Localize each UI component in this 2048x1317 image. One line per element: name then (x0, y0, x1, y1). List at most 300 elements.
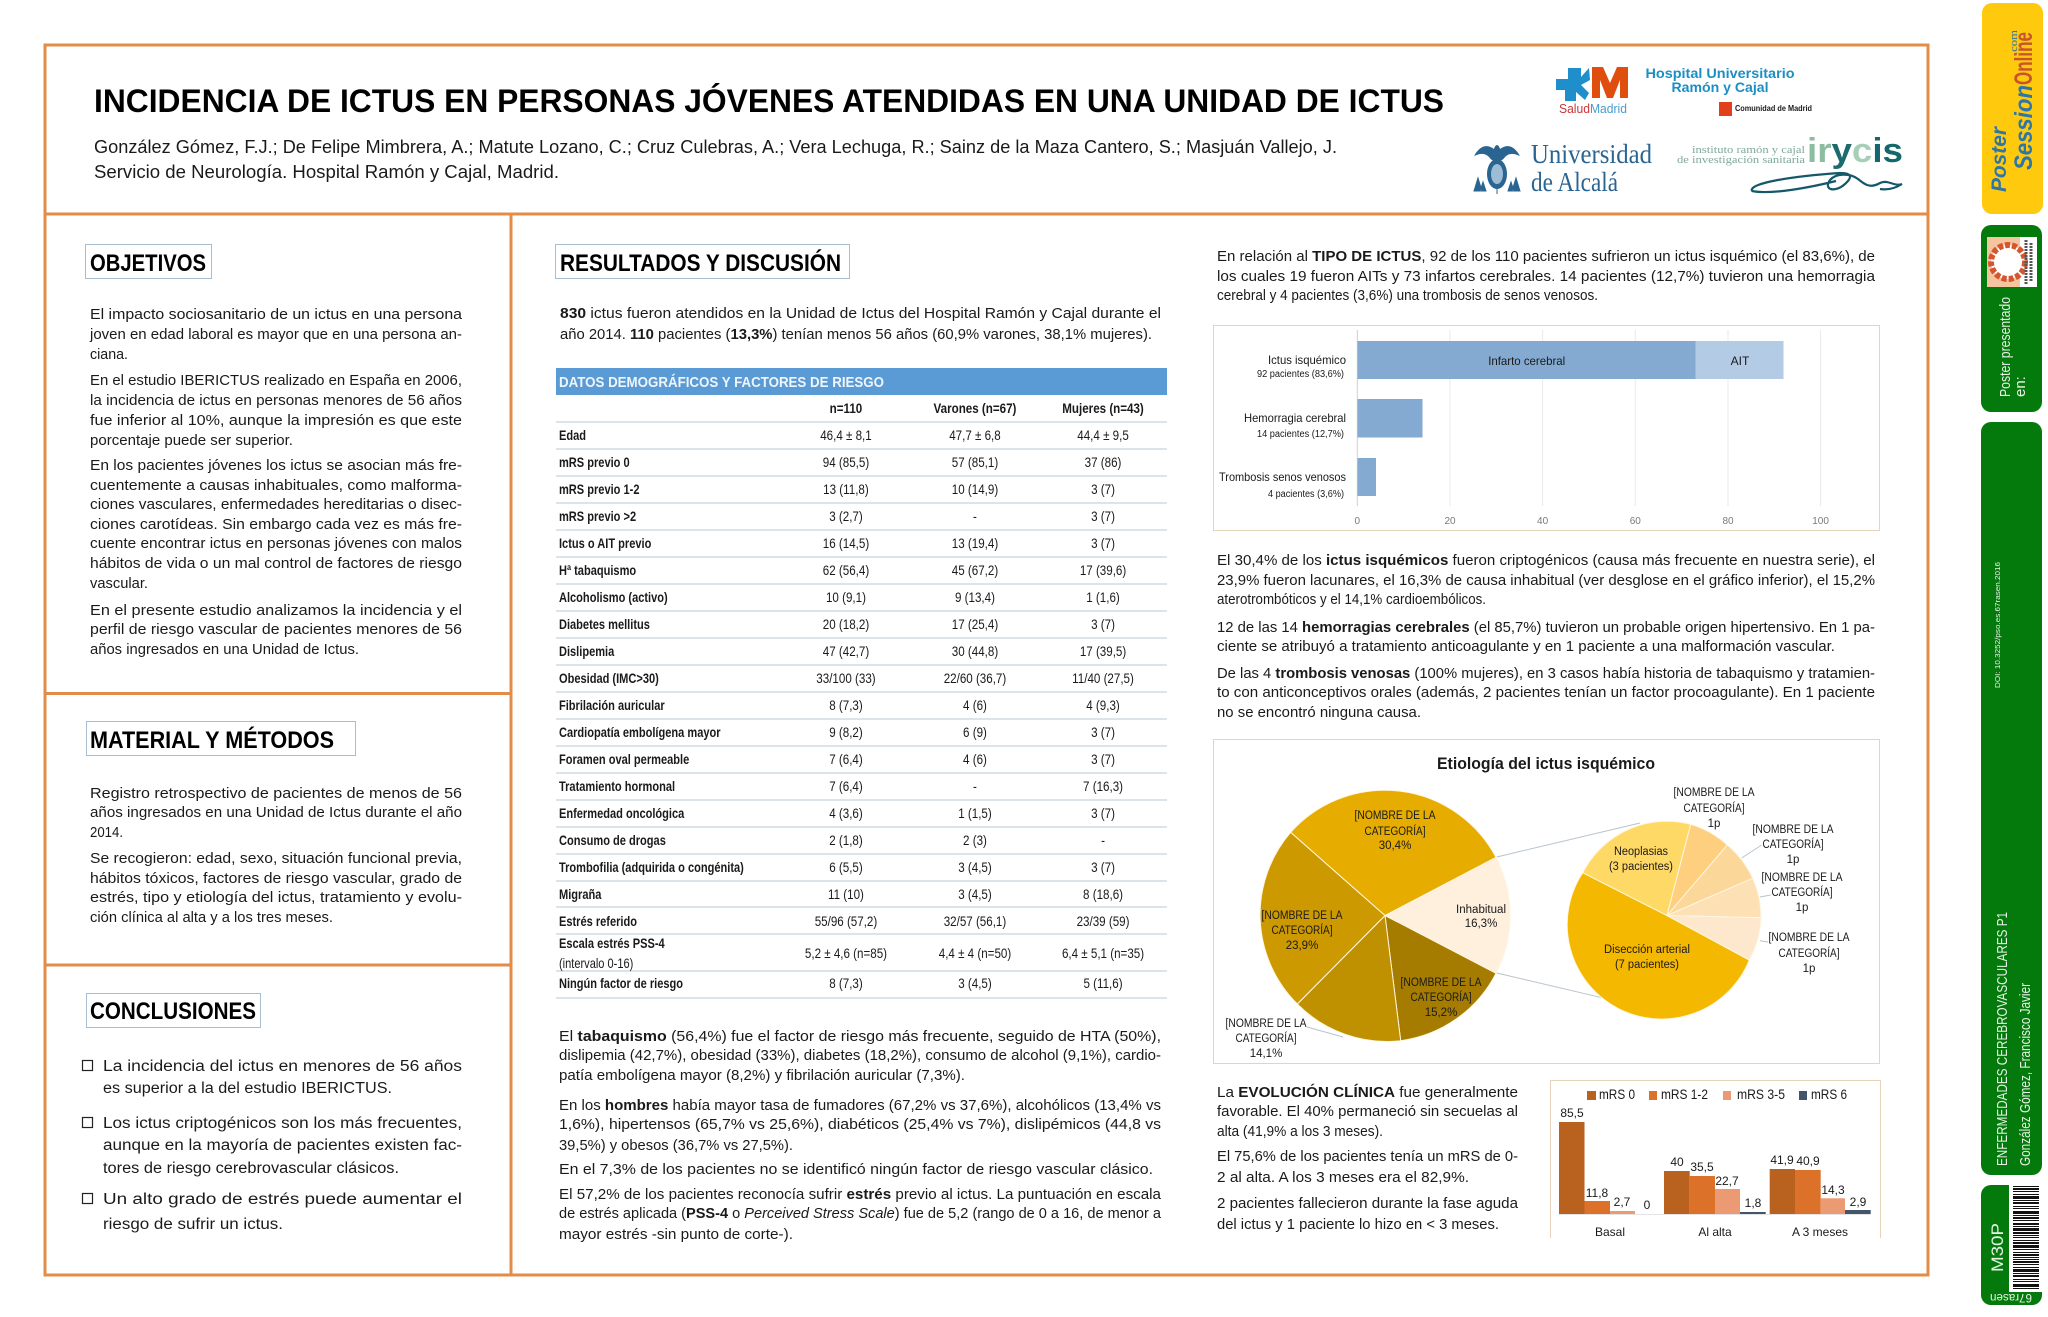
row: diabetes: 3 (7) (1091, 617, 1115, 632)
row: mRS previo 0: 37 (86) (1085, 455, 1121, 470)
text: objetivos paragraph 3: cuente encontrar ictus en personas jóvenes con malos (90, 536, 462, 552)
bars: a 3 meses (1770, 1153, 1871, 1239)
sidebar: session and author: DOI: 10.3252/pso.es.67rasen.2016 (1995, 562, 2002, 688)
row: obesidad: Obesidad (IMC>30) (559, 671, 659, 686)
x axis labels: 100 (1812, 516, 1829, 527)
row: migraña: 11 (10) (828, 887, 864, 902)
row: escala estrés PSS-4: 4,4 ± 4 (n=50) (939, 946, 1011, 961)
text: objetivos paragraph 2: fue inferior al 10%, aunque la impresión es que este (90, 413, 462, 429)
sidebar: poster code and barcode (1981, 1185, 2043, 1305)
text: trombosis venosas: no se encontró ninguna causa. (1217, 705, 1421, 721)
text: tabaquismo: patía embolígena mayor (8,2%) y fibrilación auricular (7,3%). (559, 1068, 965, 1084)
bars: a 3 meses: 14,3 (1821, 1183, 1845, 1197)
row: diabetes: 20 (18,2) (823, 617, 869, 632)
chart legend (1587, 1086, 1847, 1102)
sidebar: PosterSessionOnline: Online (2010, 32, 2038, 85)
column headers: n=110 (830, 401, 862, 416)
row: ningún factor de riesgo: 3 (4,5) (958, 976, 992, 991)
row: tabaquismo: Hª tabaquismo (559, 563, 637, 578)
bars: basal: 2,7 (1614, 1195, 1631, 1209)
text: métodos paragraph 2: estrés, tipo y etiología del ictus, tratamiento y evolu- (90, 890, 462, 906)
main pie labels: CATEGORÍA] (1272, 924, 1332, 937)
row: foramen oval: Foramen oval permeable (559, 752, 689, 767)
text: objetivos paragraph 1 (89, 307, 463, 363)
sidebar: PosterSessionOnline: .com (2009, 30, 2020, 55)
row: obesidad: 33/100 (33) (816, 671, 876, 686)
authors and affiliation (94, 137, 1337, 182)
main pie (1260, 790, 1510, 1041)
text: tipo de ictus (1217, 249, 1876, 304)
inhabitual breakdown pie (1567, 821, 1761, 1019)
text: objetivos paragraph 2 (90, 373, 462, 449)
row: tratamiento hormonal: 7 (6,4) (829, 779, 863, 794)
main pie labels: [NOMBRE DE LA (1262, 910, 1343, 922)
row: tabaquismo: 45 (67,2) (952, 563, 998, 578)
row: obesidad (559, 671, 1134, 686)
logo: SaludMadrid: SaludMadrid (1559, 101, 1627, 116)
bars: a 3 meses: A 3 meses (1792, 1225, 1848, 1239)
row: mRS previo 0: mRS previo 0 (559, 455, 630, 470)
text: trombosis venosas: De las 4 trombosis venosas (100% mujeres), en 3 casos había historia de tabaquismo y tratamien- (1217, 666, 1875, 682)
text: tabaquismo (559, 1029, 1161, 1084)
row: diabetes (559, 617, 1115, 632)
row: dislipemia: 30 (44,8) (952, 644, 998, 659)
row: enfermedad oncológica: 1 (1,5) (958, 806, 992, 821)
text: métodos paragraph 1 (90, 786, 462, 841)
text: ictus isquémicos: 23,9% fueron lacunares, el 16,3% de causa inhabitual (ver desglose en el gráfico inferior), el 15,2% (1217, 573, 1875, 589)
row: escala estrés PSS-4 (559, 936, 1144, 971)
bars: al alta (1664, 1155, 1766, 1239)
row: consumo de drogas: - (1101, 833, 1105, 848)
logo: Comunidad de Madrid (1719, 102, 1812, 116)
row: alcoholismo (559, 590, 1120, 605)
row: ningún factor de riesgo (559, 976, 1123, 991)
text: resultados intro: 830 ictus fueron atendidos en la Unidad de Ictus del Hospital Ramón y Cajal durante el (560, 306, 1161, 322)
breakdown pie labels: [NOMBRE DE LA (1768, 932, 1850, 944)
x axis labels: 20 (1444, 516, 1456, 527)
row: mRS previo 1-2: 3 (7) (1091, 482, 1115, 497)
main pie labels: 15,2% (1425, 1007, 1457, 1019)
main pie labels: Inhabitual (1456, 904, 1506, 916)
bar: hemorragia cerebral: 14 pacientes (12,7%) (1257, 429, 1344, 440)
text: sin factor de riesgo: En el 7,3% de los pacientes no se identificó ningún factor de riesgo vascular clásico. (559, 1162, 1153, 1178)
row: trombofilia: 6 (5,5) (829, 860, 863, 875)
main pie labels (1226, 810, 1506, 1060)
row: fibrilación auricular: 4 (6) (963, 698, 987, 713)
row: estrés referido: 32/57 (56,1) (944, 914, 1006, 929)
text: objetivos paragraph 3 (90, 458, 462, 592)
row: trombofilia: 3 (7) (1091, 860, 1115, 875)
x axis labels (1355, 516, 1829, 527)
row: tratamiento hormonal: 7 (16,3) (1083, 779, 1123, 794)
breakdown pie labels: CATEGORÍA] (1772, 886, 1832, 899)
text: métodos paragraph 2 (90, 851, 462, 926)
row: edad: 46,4 ± 8,1 (820, 428, 872, 443)
row: mRS previo >2: - (973, 509, 977, 524)
row: consumo de drogas: Consumo de drogas (559, 833, 666, 848)
row: enfermedad oncológica: Enfermedad oncológica (559, 806, 684, 821)
row: escala estrés PSS-4: 5,2 ± 4,6 (n=85) (805, 946, 887, 961)
text: objetivos paragraph 1: El impacto sociosanitario de un ictus en una persona (90, 307, 463, 323)
bars: basal: 85,5 (1560, 1106, 1584, 1120)
text: objetivos paragraph 4: perfil de riesgo vascular de pacientes menores de 56 (90, 622, 462, 638)
bar: ictus isquémico (1257, 341, 1784, 380)
text: ictus isquémicos: aterotrombóticos y el 14,1% cardioembólicos. (1217, 592, 1486, 608)
row: tabaquismo: 17 (39,6) (1080, 563, 1126, 578)
row: fibrilación auricular: 4 (9,3) (1086, 698, 1120, 713)
conclusion 1: La incidencia del ictus en menores de 56 años (103, 1058, 462, 1075)
bars: al alta: 40 (1670, 1155, 1684, 1169)
logo: Hospital Universitario Ramón y Cajal: Ramón y Cajal (1672, 79, 1768, 95)
row: migraña (559, 887, 1123, 902)
text: estrés: de estrés aplicada (PSS-4 o Perceived Stress Scale) fue de 5,2 (rango de 0 a 16, de menor a (559, 1206, 1162, 1222)
logo: IRYCIS: de investigación sanitaria (1677, 155, 1806, 166)
breakdown pie labels: Disección arterial (1604, 944, 1690, 956)
bars: al alta: 22,7 (1715, 1174, 1739, 1188)
text: objetivos paragraph 3: ciones vasculares, enfermedades hereditarias o disec- (90, 497, 462, 513)
row: dislipemia: Dislipemia (559, 644, 614, 659)
heading: conclusiones: CONCLUSIONES (90, 998, 256, 1025)
text: métodos paragraph 1: Registro retrospectivo de pacientes de menos de 56 (90, 786, 462, 802)
bars: basal: Basal (1595, 1225, 1625, 1239)
bar: ictus isquémico: Infarto cerebral (1488, 354, 1565, 368)
row: tabaquismo (559, 563, 1126, 578)
text: tabaquismo: dislipemia (42,7%), obesidad (33%), diabetes (18,2%), consumo de alcohol (9,1%), cardio- (559, 1048, 1161, 1064)
logo: Universidad de Alcalá: de Alcalá (1531, 167, 1618, 197)
chart title: Etiología del ictus isquémico (1437, 754, 1655, 773)
x axis labels: 80 (1722, 516, 1734, 527)
row: foramen oval (559, 752, 1115, 767)
row: cardiopatía (559, 725, 1115, 740)
conclusion 1 (82, 1058, 462, 1097)
row: dislipemia (559, 644, 1126, 659)
main pie labels: CATEGORÍA] (1364, 825, 1426, 838)
text: objetivos paragraph 1: ciana. (90, 347, 128, 363)
bar: trombosis senos venosos: 4 pacientes (3,6%) (1268, 489, 1344, 500)
main pie labels: 14,1% (1250, 1048, 1282, 1060)
text: evolución clínica 3: 2 pacientes fallecieron durante la fase aguda (1217, 1196, 1519, 1212)
row: tabaquismo: 62 (56,4) (823, 563, 869, 578)
row: foramen oval: 4 (6) (963, 752, 987, 767)
bars: a 3 meses: 40,9 (1796, 1154, 1820, 1168)
row: estrés referido: 23/39 (59) (1077, 914, 1129, 929)
chart legend: mRS 1-2 (1661, 1086, 1708, 1102)
text: hombres: 1,6%), hipertensos (65,7% vs 25,6%), diabéticos (25,4% vs 7%), dislipémicos (44,8 vs (559, 1117, 1161, 1133)
row: diabetes: 17 (25,4) (952, 617, 998, 632)
breakdown pie labels: (7 pacientes) (1615, 959, 1679, 971)
conclusion 2: Los ictus criptogénicos son los más frecuentes, (103, 1115, 462, 1132)
text: evolución clínica 1 (1217, 1083, 1518, 1140)
logo: IRYCIS (1677, 132, 1903, 192)
text: estrés: mayor estrés -sin punto de corte-). (559, 1227, 793, 1243)
row: ictus o AIT previo: 13 (19,4) (952, 536, 998, 551)
logo: SaludMadrid (1556, 67, 1628, 116)
panel: material y métodos (86, 722, 462, 926)
text: métodos paragraph 1: 2014. (90, 825, 123, 841)
row: cardiopatía: 6 (9) (963, 725, 987, 740)
bar: hemorragia cerebral (1244, 399, 1422, 440)
row: alcoholismo: 9 (13,4) (955, 590, 995, 605)
text: objetivos paragraph 3: cuentemente a causas inhabituales, como malforma- (90, 478, 462, 494)
panel: objetivos (86, 244, 463, 658)
row: mRS previo 1-2: mRS previo 1-2 (559, 482, 640, 497)
bar: hemorragia cerebral: Hemorragia cerebral (1244, 411, 1346, 425)
breakdown pie labels: CATEGORÍA] (1684, 802, 1744, 815)
bars: al alta: 1,8 (1745, 1196, 1762, 1210)
text: métodos paragraph 2: hábitos tóxicos, factores de riesgo vascular, grado de (90, 871, 462, 887)
row: mRS previo 0: 94 (85,5) (823, 455, 869, 470)
row: migraña: 3 (4,5) (958, 887, 992, 902)
sidebar: session and author: ENFERMEDADES CEREBROVASCULARES P1 (1995, 912, 2011, 1166)
column headers: Mujeres (n=43) (1062, 401, 1144, 416)
text: objetivos paragraph 3: hábitos de vida o un mal control de factores de riesgo (90, 556, 462, 572)
sidebar: poster code and barcode: 67rasen (1990, 1291, 2032, 1305)
text: métodos paragraph 1: años ingresados en una Unidad de Ictus durante el año (90, 805, 462, 821)
x axis labels: 60 (1630, 516, 1641, 527)
bar: ictus isquémico: AIT (1731, 354, 1750, 368)
text: objetivos paragraph 3: En los pacientes jóvenes los ictus se asocian más fre- (90, 458, 462, 474)
conclusion 3: riesgo de sufrir un ictus. (103, 1216, 283, 1233)
text: objetivos paragraph 1: joven en edad laboral es mayor que en una persona an- (89, 327, 462, 343)
text: objetivos paragraph 3: ciones carotídeas. Sin embargo cada vez es más fre- (90, 517, 462, 533)
logo: IRYCIS: irycis (1807, 132, 1903, 170)
row: tratamiento hormonal (559, 779, 1123, 794)
row: obesidad: 11/40 (27,5) (1072, 671, 1134, 686)
row: edad: Edad (559, 428, 586, 443)
row: trombofilia: Trombofilia (adquirida o congénita) (559, 860, 744, 875)
heading: resultados y discusión: RESULTADOS Y DISCUSIÓN (560, 249, 841, 277)
row: ictus o AIT previo: 3 (7) (1091, 536, 1115, 551)
bar: ictus isquémico: Ictus isquémico (1268, 353, 1346, 367)
row: cardiopatía: 3 (7) (1091, 725, 1115, 740)
bar chart: evolución mRS (1550, 1080, 1880, 1239)
column headers (830, 401, 1144, 416)
row: estrés referido: 55/96 (57,2) (815, 914, 877, 929)
row: foramen oval: 7 (6,4) (829, 752, 863, 767)
text: hemorragias cerebrales: 12 de las 14 hemorragias cerebrales (el 85,7%) tuvieron un probable origen hipertensivo. En 1 pa- (1217, 620, 1875, 636)
row: enfermedad oncológica (559, 806, 1115, 821)
sidebar: PosterSessionOnline: Session (2010, 85, 2038, 170)
row: alcoholismo: 10 (9,1) (826, 590, 866, 605)
title: INCIDENCIA DE ICTUS EN PERSONAS JÓVENES ATENDIDAS EN UNA UNIDAD DE ICTUS (94, 83, 1444, 119)
text: evolución clínica 1: favorable. El 40% permaneció sin secuelas al (1217, 1104, 1518, 1120)
breakdown pie labels: CATEGORÍA] (1762, 838, 1824, 851)
row: cardiopatía: Cardiopatía embolígena mayor (559, 725, 721, 740)
text: hemorragias cerebrales (1217, 620, 1875, 655)
row: consumo de drogas (559, 833, 1105, 848)
conclusion 3: Un alto grado de estrés puede aumentar el (103, 1191, 462, 1208)
sidebar: PosterSessionOnline: Poster (1988, 125, 2011, 192)
row: mRS previo >2: 3 (7) (1091, 509, 1115, 524)
main pie labels: 23,9% (1286, 940, 1318, 952)
text: hombres: 39,5%) y obesos (36,7% vs 27,5%). (559, 1138, 793, 1154)
text: objetivos paragraph 4: años ingresados en una Unidad de Ictus. (90, 642, 359, 658)
row: consumo de drogas: 2 (1,8) (829, 833, 863, 848)
table header band (556, 368, 1167, 395)
heading: objetivos: OBJETIVOS (90, 250, 206, 277)
text: evolución clínica 1: alta (41,9% a los 3 meses). (1217, 1124, 1383, 1140)
column headers: Varones (n=67) (934, 401, 1016, 416)
panel: conclusiones (82, 994, 462, 1233)
breakdown pie labels: 1p (1787, 854, 1799, 866)
text: ictus isquémicos: El 30,4% de los ictus isquémicos fueron criptogénicos (causa más frecuente en nuestra serie), el (1217, 553, 1875, 569)
sidebar: PosterSessionOnline (1982, 3, 2043, 214)
bars: a 3 meses: 2,9 (1850, 1195, 1867, 1209)
row: migraña: 8 (18,6) (1083, 887, 1123, 902)
main pie labels: CATEGORÍA] (1410, 991, 1472, 1004)
text: evolución clínica 1: La EVOLUCIÓN CLÍNICA fue generalmente (1217, 1083, 1518, 1101)
breakdown pie labels: CATEGORÍA] (1778, 947, 1840, 960)
breakdown pie labels: [NOMBRE DE LA (1752, 824, 1834, 836)
row: enfermedad oncológica: 4 (3,6) (829, 806, 863, 821)
row: diabetes: Diabetes mellitus (559, 617, 650, 632)
row: mRS previo 1-2: 13 (11,8) (823, 482, 869, 497)
row: enfermedad oncológica: 3 (7) (1091, 806, 1115, 821)
bars: al alta: 35,5 (1690, 1160, 1714, 1174)
bar: trombosis senos venosos: Trombosis senos venosos (1219, 470, 1346, 484)
row: cardiopatía: 9 (8,2) (829, 725, 863, 740)
row: dislipemia: 47 (42,7) (823, 644, 869, 659)
x axis labels: 0 (1355, 516, 1361, 527)
row: alcoholismo: Alcoholismo (activo) (559, 590, 668, 605)
row: ictus o AIT previo (559, 536, 1115, 551)
text: resultados intro (560, 306, 1161, 343)
conclusion 3 (82, 1191, 462, 1233)
bars: basal: 0 (1644, 1198, 1651, 1212)
text: tipo de ictus: los cuales 19 fueron AITs y 73 infartos cerebrales. 14 pacientes (12,7%) tuvieron una hemorragia (1217, 269, 1876, 285)
text: métodos paragraph 2: Se recogieron: edad, sexo, situación funcional previa, (90, 851, 462, 867)
row: edad (559, 428, 1129, 443)
bar: ictus isquémico: 92 pacientes (83,6%) (1257, 369, 1344, 380)
row: trombofilia (559, 860, 1115, 875)
row: mRS previo 1-2: 10 (14,9) (952, 482, 998, 497)
breakdown pie labels: 1p (1803, 963, 1815, 975)
sidebar: congress badge: Poster presentado (1997, 297, 2014, 397)
text: evolución clínica 2 (1217, 1149, 1518, 1186)
text: evolución clínica 2: El 75,6% de los pacientes tenía un mRS de 0- (1217, 1149, 1518, 1165)
breakdown pie labels: 1p (1708, 818, 1720, 830)
sidebar: session and author: González Gómez, Francisco Javier (2018, 983, 2034, 1166)
chart legend: mRS 0 (1599, 1086, 1635, 1102)
text: métodos paragraph 2: ción clínica al alta y a los tres meses. (90, 910, 333, 926)
sidebar: congress badge (1981, 225, 2042, 412)
main pie labels: CATEGORÍA] (1236, 1032, 1296, 1045)
main pie labels: [NOMBRE DE LA (1400, 977, 1482, 989)
pie chart: etiología del ictus isquémico (1214, 740, 1880, 1064)
bars: a 3 meses: 41,9 (1770, 1153, 1794, 1167)
breakdown pie labels: [NOMBRE DE LA (1674, 787, 1755, 799)
text: hombres (559, 1098, 1161, 1154)
row: ningún factor de riesgo: 5 (11,6) (1083, 976, 1123, 991)
breakdown pie labels (1604, 787, 1850, 975)
sidebar: poster code and barcode: M30P (1988, 1223, 2007, 1272)
text: tipo de ictus: cerebral y 4 pacientes (3,6%) una trombosis de senos venosos. (1217, 288, 1598, 304)
logo: Hospital Universitario Ramón y Cajal (1646, 65, 1794, 95)
logo: IRYCIS: instituto ramón y cajal (1692, 145, 1805, 156)
row: dislipemia: 17 (39,5) (1080, 644, 1126, 659)
breakdown pie labels: [NOMBRE DE LA (1762, 872, 1843, 884)
text: evolución clínica 3 (1217, 1196, 1519, 1233)
breakdown pie labels: (3 pacientes) (1609, 861, 1673, 873)
row: consumo de drogas: 2 (3) (963, 833, 987, 848)
row: trombofilia: 3 (4,5) (958, 860, 992, 875)
row: escala estrés PSS-4: Escala estrés PSS-4 (559, 936, 665, 951)
chart legend: mRS 3-5 (1737, 1086, 1785, 1102)
conclusion 1: es superior a la del estudio IBERICTUS. (103, 1080, 392, 1097)
bar chart: tipo de ictus (1214, 326, 1880, 530)
authors and affiliation: Servicio de Neurología. Hospital Ramón y Cajal, Madrid. (94, 162, 559, 182)
heading: objetivos (86, 244, 212, 278)
row: estrés referido: Estrés referido (559, 914, 637, 929)
row: migraña: Migraña (559, 887, 602, 902)
main pie labels: 16,3% (1465, 918, 1497, 930)
row: mRS previo >2 (559, 509, 1115, 524)
main pie labels: [NOMBRE DE LA (1354, 810, 1436, 822)
text: evolución clínica 3: del ictus y 1 paciente lo hizo en < 3 meses. (1217, 1217, 1499, 1233)
row: ictus o AIT previo: 16 (14,5) (823, 536, 869, 551)
table header band: DATOS DEMOGRÁFICOS Y FACTORES DE RIESGO (559, 374, 884, 391)
row: mRS previo 0: 57 (85,1) (952, 455, 998, 470)
bars: al alta: Al alta (1698, 1225, 1732, 1239)
text: hemorragias cerebrales: ciente se atribuyó a tratamiento anticoagulante y en 1 paciente a una malformación vascular. (1217, 639, 1835, 655)
row: fibrilación auricular (559, 698, 1120, 713)
text: resultados intro: año 2014. 110 pacientes (13,3%) tenían menos 56 años (60,9% varones, 38,1% mujeres). (560, 327, 1152, 343)
row: estrés referido (559, 914, 1129, 929)
main pie labels: [NOMBRE DE LA (1226, 1018, 1307, 1030)
logo: Hospital Universitario Ramón y Cajal: Hospital Universitario (1646, 65, 1794, 81)
chart legend: mRS 6 (1811, 1086, 1847, 1102)
text: trombosis venosas: to con anticonceptivos orales (además, 2 pacientes tenían un factor procoagulante). En 1 paciente (1217, 685, 1875, 701)
row: tratamiento hormonal: Tratamiento hormonal (559, 779, 675, 794)
row: mRS previo >2: 3 (2,7) (829, 509, 863, 524)
row: escala estrés PSS-4: (intervalo 0-16) (559, 956, 633, 971)
row: alcoholismo: 1 (1,6) (1086, 590, 1120, 605)
bar: trombosis senos venosos (1219, 458, 1376, 500)
logo: Universidad de Alcalá (1474, 139, 1652, 197)
text: trombosis venosas (1217, 666, 1875, 721)
logo: Comunidad de Madrid: Comunidad de Madrid (1735, 104, 1812, 113)
text: objetivos paragraph 2: En el estudio IBERICTUS realizado en España en 2006, (90, 373, 462, 389)
text: hombres: En los hombres había mayor tasa de fumadores (67,2% vs 37,6%), alcohólicos (13,4% vs (559, 1098, 1161, 1114)
row: ningún factor de riesgo: 8 (7,3) (829, 976, 863, 991)
text: objetivos paragraph 2: porcentaje puede ser superior. (90, 433, 293, 449)
conclusion 2: tores de riesgo cerebrovascular clásicos. (103, 1160, 399, 1177)
text: objetivos paragraph 3: vascular. (90, 576, 148, 592)
x axis labels: 40 (1537, 516, 1549, 527)
text: evolución clínica 2: 2 al alta. A los 3 meses era el 82,9%. (1217, 1170, 1469, 1186)
row: fibrilación auricular: 8 (7,3) (829, 698, 863, 713)
breakdown pie labels: 1p (1796, 902, 1808, 914)
authors and affiliation: González Gómez, F.J.; De Felipe Mimbrera, A.; Matute Lozano, C.; Cruz Culebras, A.; Vera Lechuga, R.; Sainz de la Maza Cantero, S.; Masjuán Vallejo, J. (94, 137, 1337, 157)
breakdown pie labels: Neoplasias (1614, 846, 1668, 858)
row: foramen oval: 3 (7) (1091, 752, 1115, 767)
heading: material y métodos: MATERIAL Y MÉTODOS (90, 726, 334, 754)
text: tipo de ictus: En relación al TIPO DE ICTUS , 92 de los 110 pacientes sufrieron un ictus isquémico (el 83,6%), de (1217, 249, 1875, 265)
text: objetivos paragraph 2: la incidencia de ictus en personas menores de 56 años (90, 393, 462, 409)
text: estrés (559, 1187, 1162, 1243)
text: ictus isquémicos (1217, 553, 1875, 608)
row: mRS previo >2: mRS previo >2 (559, 509, 636, 524)
row: tratamiento hormonal: - (973, 779, 977, 794)
bars: basal (1559, 1106, 1651, 1239)
table: datos demográficos y factores de riesgo (556, 368, 1167, 998)
sidebar: congress badge: en: (2012, 376, 2029, 397)
text: objetivos paragraph 4 (90, 603, 462, 658)
bars: basal: 11,8 (1586, 1186, 1609, 1200)
row: mRS previo 0 (559, 455, 1121, 470)
row: edad: 44,4 ± 9,5 (1077, 428, 1129, 443)
row: fibrilación auricular: Fibrilación auricular (559, 698, 665, 713)
